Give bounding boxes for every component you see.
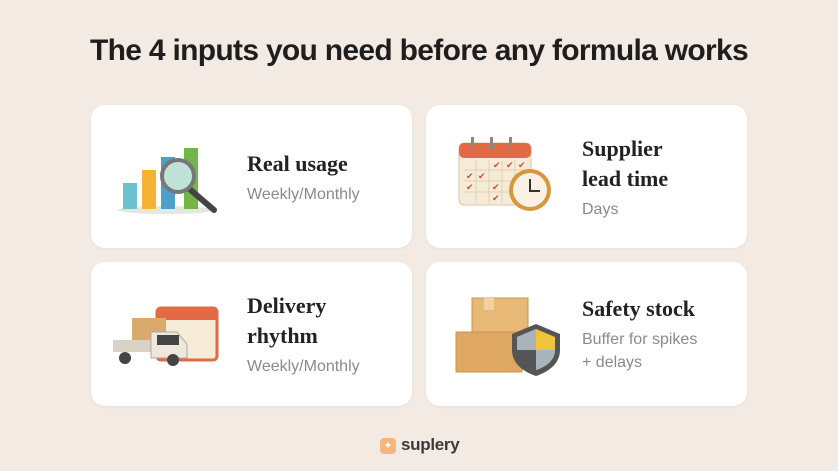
icon: calendar with clock: ✔ — [492, 182, 500, 192]
icon: calendar with clock: ✔ — [478, 171, 486, 181]
heading — [582, 136, 668, 191]
panel: delivery rhythm — [91, 262, 412, 406]
text: Days — [582, 201, 618, 218]
icon: calendar with clock: ✔ — [492, 193, 500, 203]
text: + delays — [582, 354, 642, 371]
heading: Real usage — [247, 151, 348, 176]
heading: Safety stock — [582, 296, 695, 321]
icon: truck with calendar — [113, 306, 218, 366]
icon: calendar with clock: ✔ — [518, 160, 526, 170]
icon: calendar with clock: ✔ — [506, 160, 514, 170]
heading: Supplier — [582, 136, 663, 161]
icon: calendar with clock — [458, 137, 551, 211]
brand name: suplery — [401, 435, 459, 454]
heading: rhythm — [247, 323, 318, 348]
panel: supplier lead time — [426, 105, 747, 248]
icon: calendar with clock: ✔ — [493, 160, 501, 170]
text: Weekly/Monthly — [247, 358, 360, 375]
icon: calendar with clock: ✔ — [466, 182, 474, 192]
heading: Delivery — [247, 293, 326, 318]
icon: calendar with clock: ✔ — [466, 171, 474, 181]
heading: lead time — [582, 166, 668, 191]
text: Buffer for spikes — [582, 331, 697, 348]
icon: bar chart with magnifier — [118, 148, 217, 214]
logo — [380, 435, 460, 454]
title: The 4 inputs you need before any formula works — [90, 34, 748, 67]
panel: safety stock — [426, 262, 747, 406]
icon: logo mark — [380, 438, 396, 454]
panel: real usage — [91, 105, 412, 248]
icon: boxes with shield — [456, 298, 560, 376]
heading — [247, 293, 326, 348]
text — [582, 331, 697, 371]
icon: logo mark: ✦ — [383, 440, 393, 452]
text: Weekly/Monthly — [247, 186, 360, 203]
